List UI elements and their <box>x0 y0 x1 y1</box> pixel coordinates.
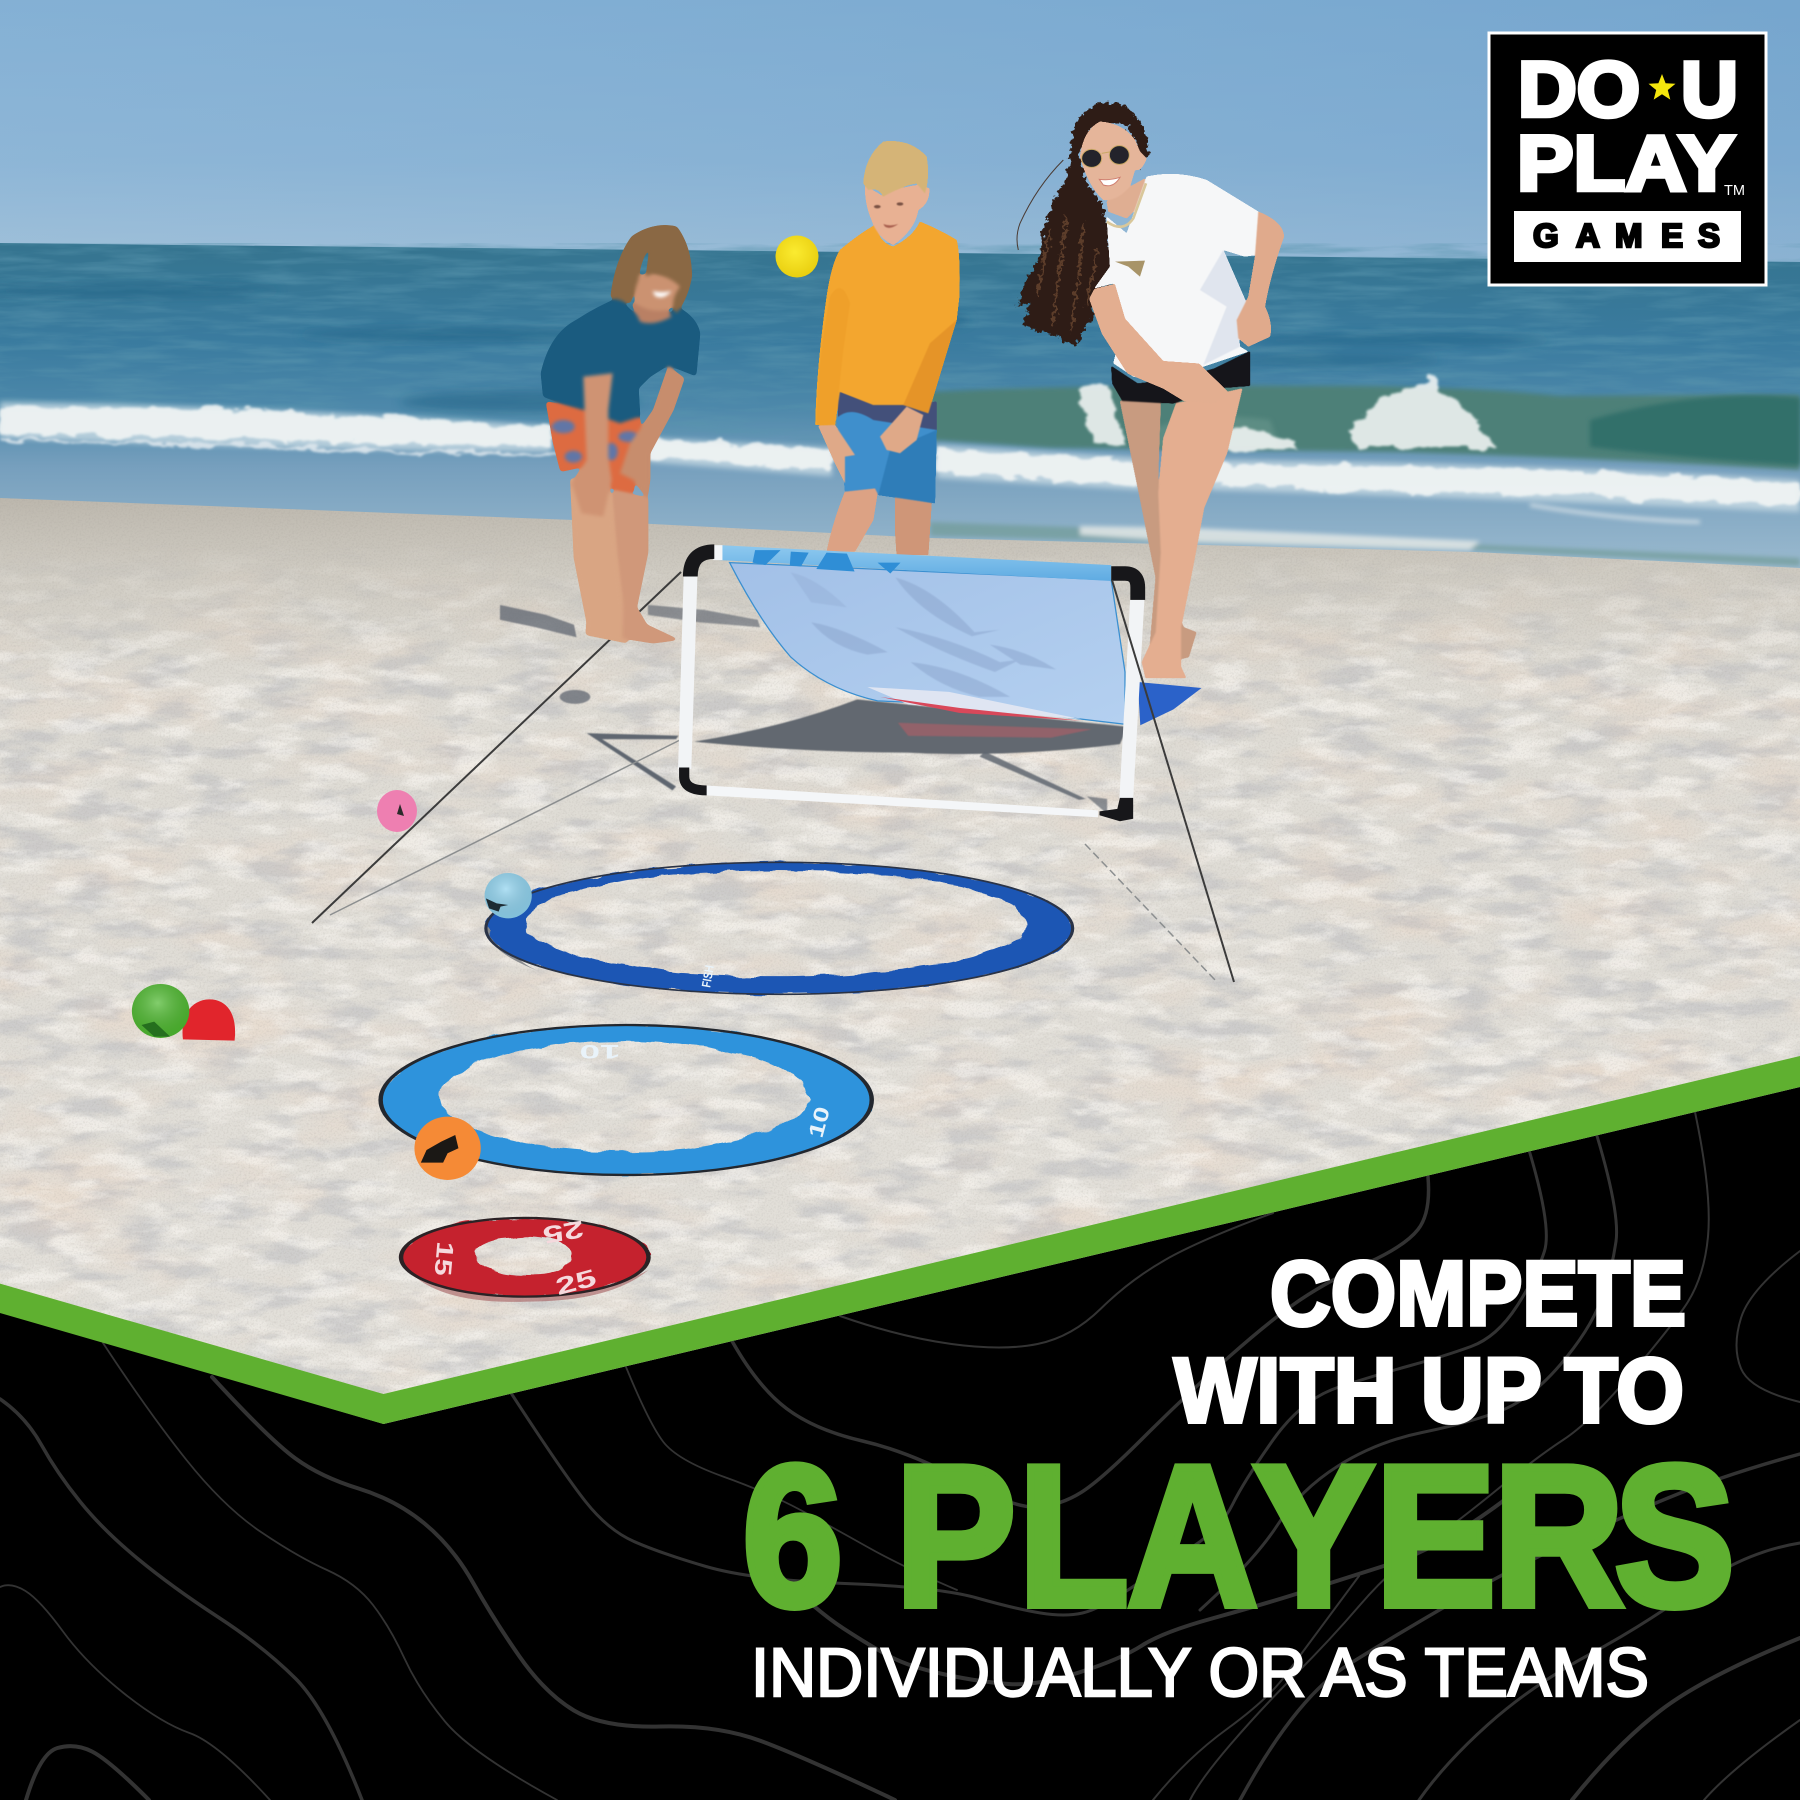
ring score numbers: 25 <box>541 1215 586 1249</box>
goal right rope <box>1112 580 1234 982</box>
ring score numbers: 25 <box>553 1264 599 1301</box>
smile <box>1099 177 1120 186</box>
heading line: WITH UP TO: WITH UP TO <box>1174 1340 1684 1442</box>
ring score numbers: 10 <box>805 1104 835 1140</box>
sand <box>0 498 1800 1430</box>
logo: Do U Play Games: TM <box>1724 182 1745 199</box>
ring: 5 points dark blue <box>486 862 1073 994</box>
logo: Do U Play Games <box>1489 33 1766 285</box>
sunglasses <box>1082 146 1129 167</box>
ring score numbers: 15 <box>429 1240 459 1277</box>
ball: red <box>183 999 235 1041</box>
sky <box>0 0 1800 270</box>
goal: left post <box>678 575 697 769</box>
heading line: COMPETE: COMPETE <box>1270 1243 1686 1345</box>
ring score numbers <box>429 964 835 1301</box>
ring: 10 points light blue <box>381 1025 872 1175</box>
big number: 6 PLAYERS: 6 PLAYERS <box>743 1425 1735 1648</box>
neck and face <box>1080 122 1284 383</box>
star <box>1648 74 1676 100</box>
breaking wave <box>930 386 1800 470</box>
surf foam <box>0 375 1800 512</box>
goal: black corner connectors <box>684 552 1138 821</box>
player: boy in orange shirt <box>815 141 960 555</box>
shadows and goal ropes on the sand <box>312 572 1217 982</box>
long curly hair <box>1017 102 1148 345</box>
ball: pink <box>377 790 417 832</box>
ball: orange <box>414 1117 481 1180</box>
subheading: INDIVIDUALLY OR AS TEAMS <box>751 1634 1649 1711</box>
logo: Do U Play Games: GAMES <box>1533 217 1720 254</box>
panel: black bottom panel with contour lines <box>0 1087 1800 1800</box>
goal: under mat <box>1138 682 1202 725</box>
player: girl in white shirt <box>1017 102 1284 678</box>
ball: green <box>132 984 189 1038</box>
player: boy in navy shirt <box>541 225 700 643</box>
photo: kids playing the game on the beach <box>0 0 1800 1430</box>
ball: light blue <box>485 873 532 918</box>
forearm and hand <box>1089 284 1231 403</box>
ocean <box>0 243 1800 580</box>
goal: right post <box>1119 600 1144 799</box>
green chevron band <box>0 1056 1800 1424</box>
ring score numbers: FISH <box>700 964 717 989</box>
goal: bottom bar <box>707 785 1098 817</box>
logo: Do U Play Games: DO <box>1518 45 1640 133</box>
goal: top bar <box>713 545 1111 581</box>
ring: 25 points red <box>401 1218 649 1302</box>
headline text <box>743 1243 1735 1711</box>
shirt print and necklace <box>1107 183 1146 277</box>
target rings and balls on the sand <box>132 862 1073 1302</box>
goal: net with fish silhouettes <box>730 563 1125 724</box>
wet reflection at the shoreline <box>930 505 1800 566</box>
logo: Do U Play Games: PLAY <box>1517 119 1735 207</box>
goal <box>678 545 1202 821</box>
ball: yellow in mid-air <box>776 236 818 278</box>
logo: Do U Play Games: U <box>1681 45 1738 133</box>
ring score numbers: 10 <box>580 1040 620 1062</box>
